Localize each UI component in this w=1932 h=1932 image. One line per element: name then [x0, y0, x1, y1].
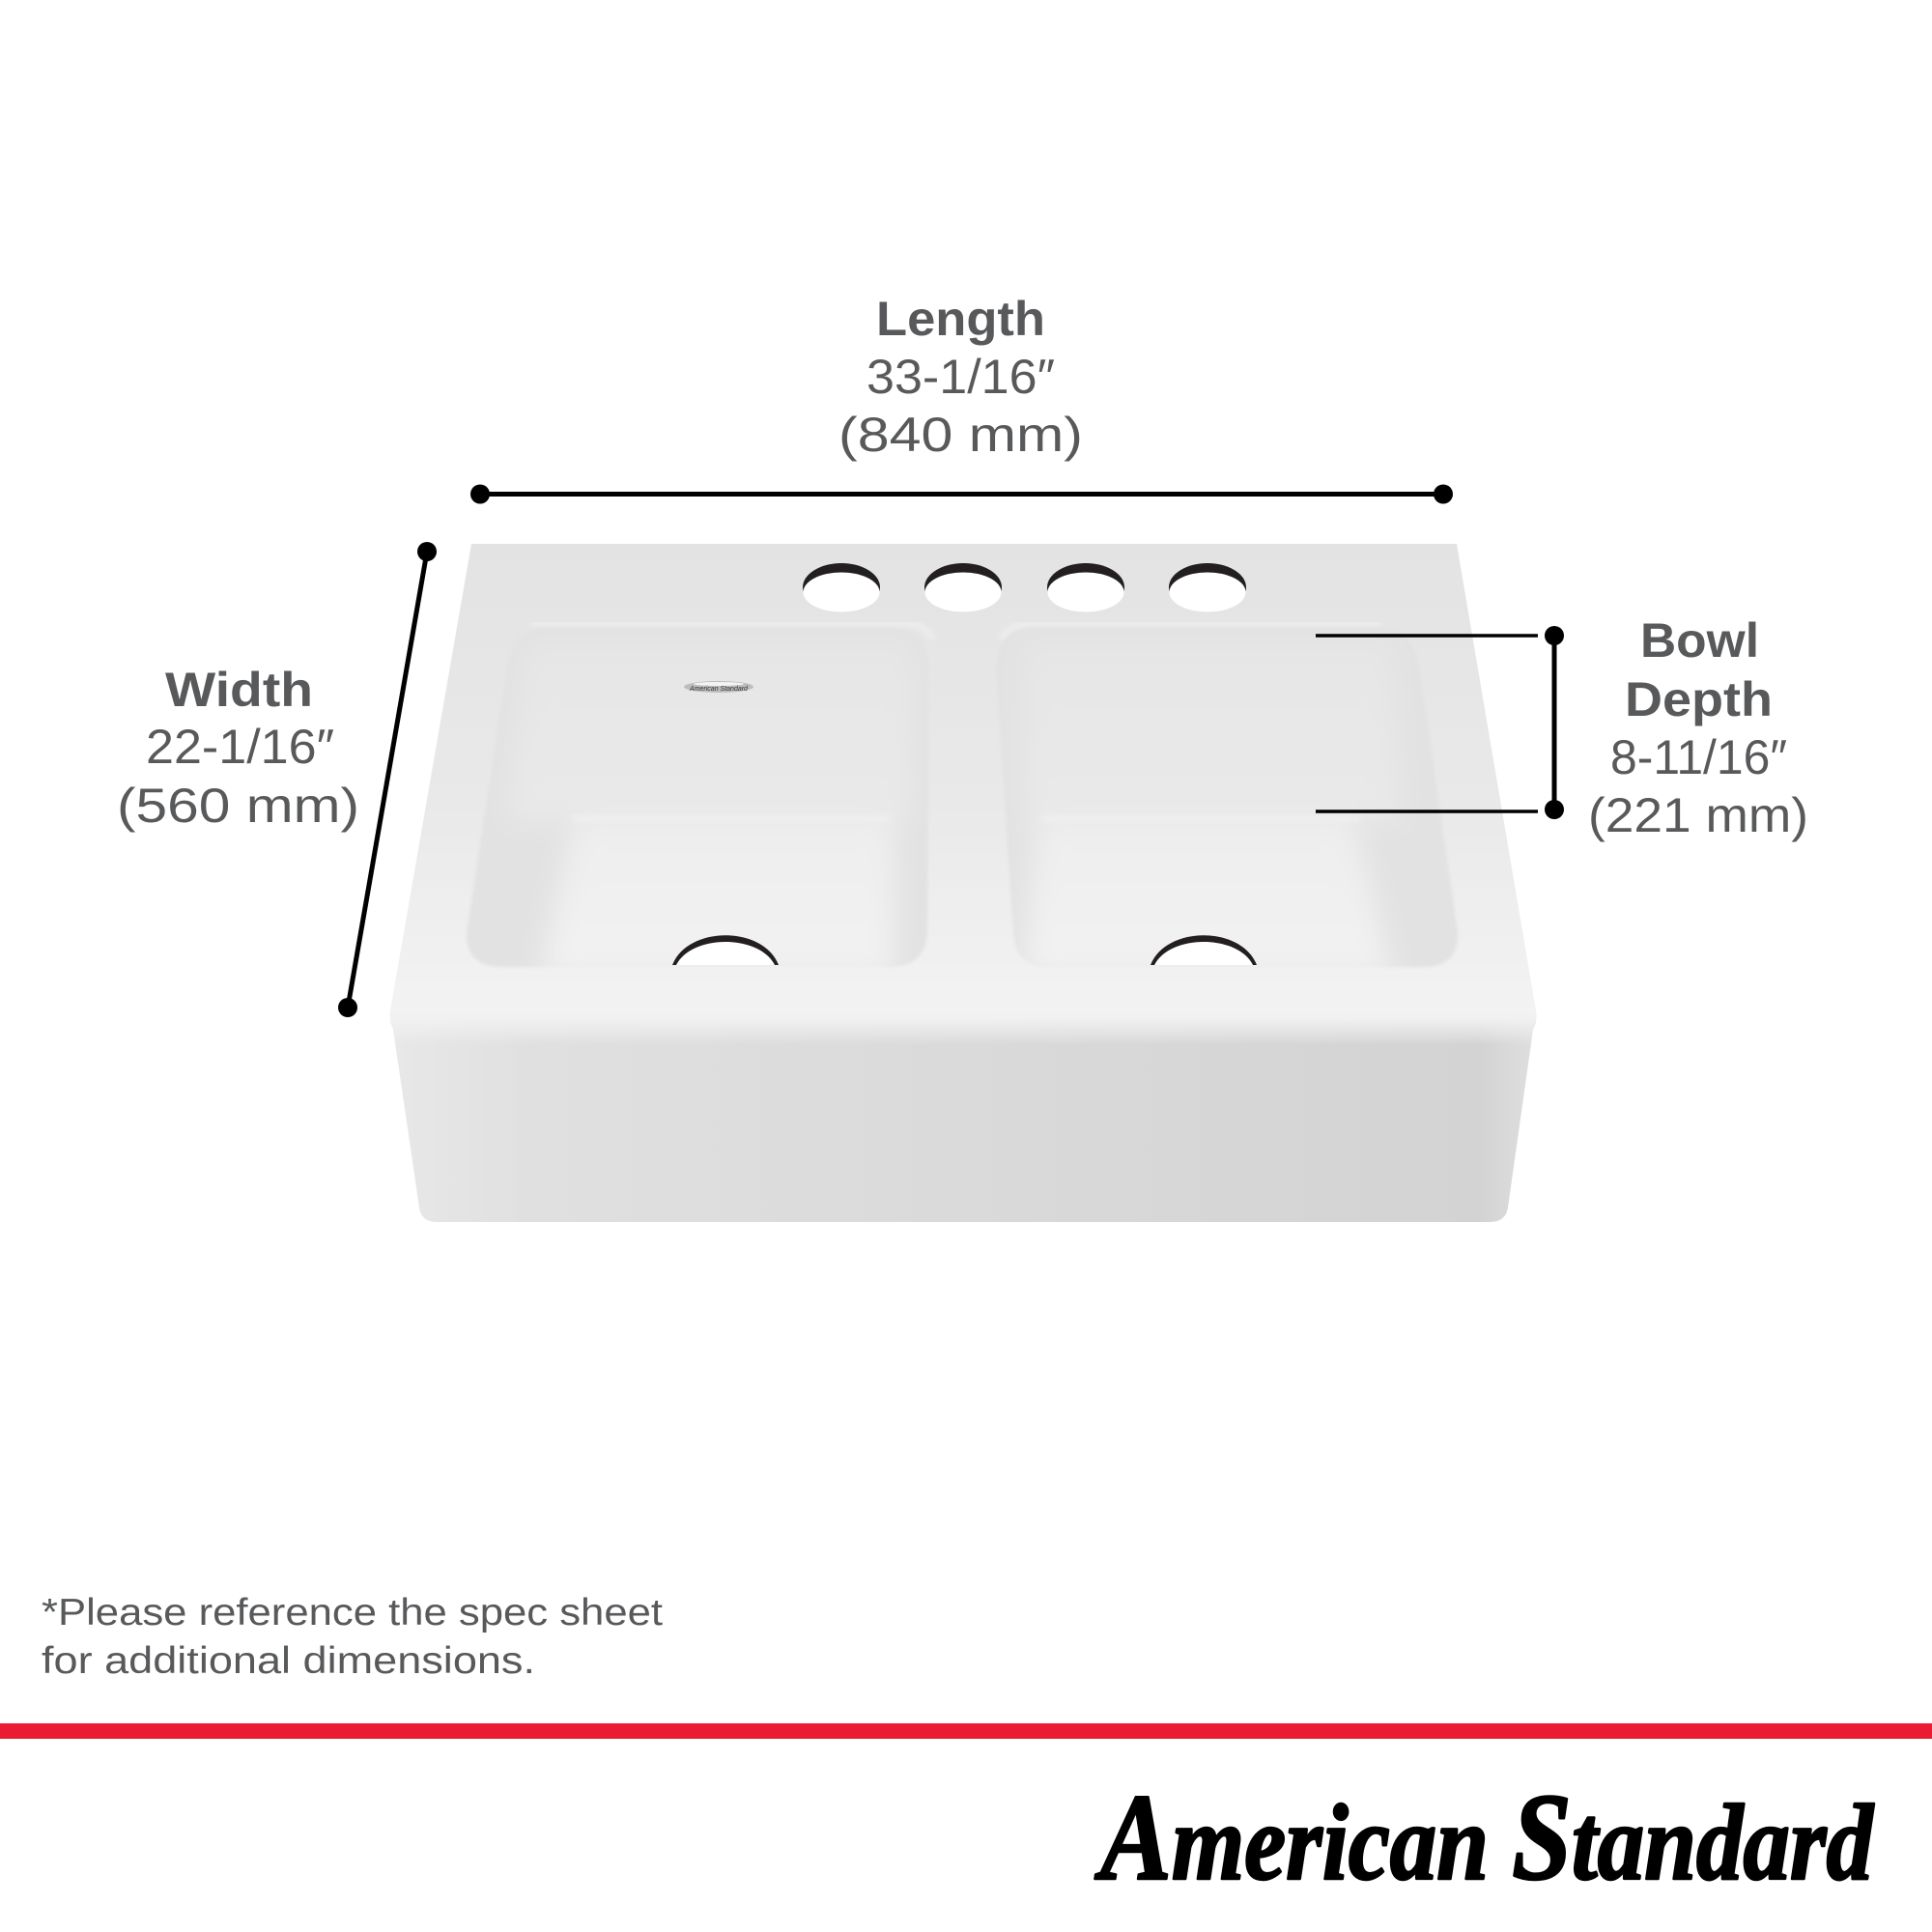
red divider bar [0, 1723, 1932, 1739]
bowl depth label [1588, 613, 1808, 842]
width label [117, 663, 359, 833]
bowl depth label: (221 mm) [1588, 788, 1808, 842]
width label: 22-1/16″ [146, 720, 334, 774]
bowl depth dimension line [1316, 626, 1564, 819]
width label: (560 mm) [117, 779, 359, 833]
bowl depth label: 8-11/16″ [1610, 730, 1787, 784]
width label: Width [165, 663, 313, 717]
sink deck [390, 544, 1536, 1024]
footnote: for additional dimensions. [42, 1640, 535, 1682]
badge on bowl wall: American Standard [689, 686, 749, 693]
footnote [42, 1592, 663, 1682]
bowl rim highlight [531, 624, 1381, 639]
sink illustration [386, 544, 1546, 1227]
badge on bowl wall [684, 681, 753, 693]
bowl depth label: Depth [1625, 672, 1773, 726]
bowl depth label: Bowl [1640, 613, 1759, 668]
length label: 33-1/16″ [867, 350, 1055, 404]
length label: Length [876, 292, 1045, 346]
left drain [672, 935, 779, 965]
length label: (840 mm) [838, 408, 1083, 462]
length dimension line [470, 485, 1453, 504]
front lip [390, 1010, 1536, 1037]
width dimension line [338, 542, 437, 1017]
footnote: *Please reference the spec sheet [42, 1592, 663, 1634]
brand logo: American Standard [1094, 1769, 1875, 1906]
length label [838, 292, 1083, 462]
right bowl [1009, 825, 1457, 967]
right drain [1151, 935, 1257, 965]
apron front [386, 1005, 1546, 1227]
left bowl [468, 825, 927, 967]
faucet holes [803, 563, 1246, 612]
